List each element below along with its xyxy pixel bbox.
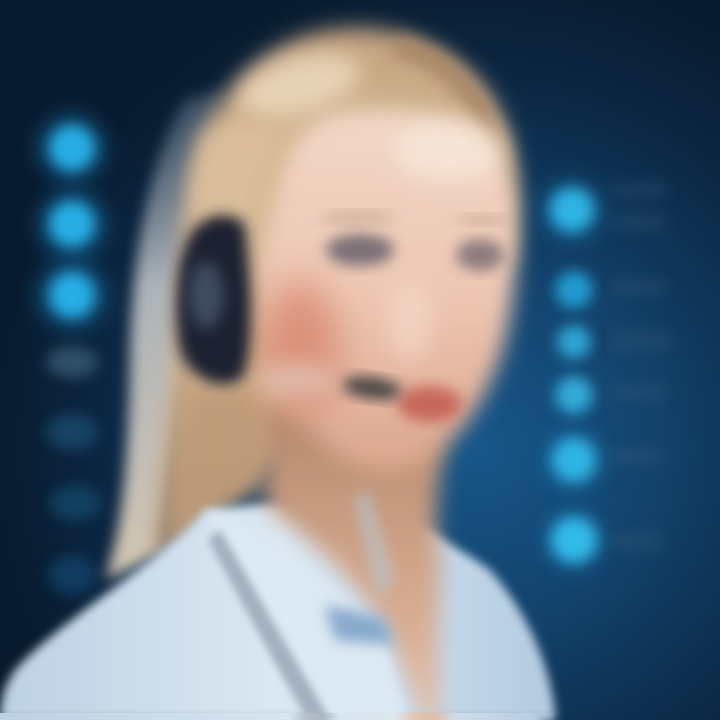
eye left xyxy=(326,234,394,266)
headset microphone xyxy=(341,373,403,403)
headset xyxy=(176,215,403,403)
icons: left column of blue dots xyxy=(36,112,108,595)
brow right xyxy=(456,215,508,225)
shirt collar details xyxy=(0,490,556,720)
face xyxy=(260,110,516,471)
brow left xyxy=(320,212,396,224)
eye right xyxy=(456,239,504,271)
shirt xyxy=(0,500,556,720)
icons: right column of blue dots with faint labels xyxy=(540,178,672,570)
neck xyxy=(262,410,445,720)
hair xyxy=(105,28,517,580)
lips xyxy=(398,386,462,422)
